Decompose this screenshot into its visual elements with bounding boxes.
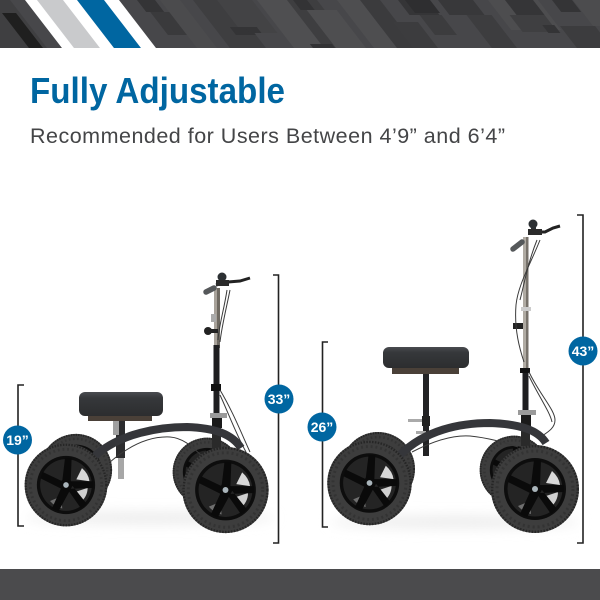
header band with geometric pattern <box>0 0 600 48</box>
rear wheels, far side <box>341 432 548 506</box>
steering column <box>513 237 536 446</box>
brake cables <box>412 240 555 452</box>
front wheels <box>327 441 579 533</box>
dimension: 33 inch handle height: 33” <box>268 391 290 407</box>
footer band <box>0 569 600 600</box>
dimension: 33 inch handle height <box>264 275 294 543</box>
seat cushion <box>79 392 163 421</box>
seat cushion <box>383 347 469 374</box>
front wheels <box>25 444 269 533</box>
curved frame <box>400 423 546 455</box>
steering column <box>204 288 227 452</box>
dimension: 26 inch seat height: 26” <box>311 419 333 435</box>
dimension: 19 inch seat height: 19” <box>6 432 29 448</box>
curved frame <box>95 427 241 456</box>
header stripes <box>25 0 156 48</box>
dimension: 43 inch handle height: 43” <box>572 343 594 359</box>
seat post <box>408 372 430 456</box>
subtitle: Recommended for Users Between 4’9” and 6’4” <box>30 124 505 148</box>
knee scooter: highest position <box>327 220 579 533</box>
handlebar and brake <box>206 272 250 292</box>
dimension: 19 inch seat height <box>3 385 32 526</box>
title: Fully Adjustable <box>30 70 285 111</box>
dimension: 43 inch handle height <box>568 215 598 543</box>
handlebar and brake <box>513 220 560 249</box>
dimension: 26 inch seat height <box>308 342 336 527</box>
knee scooter: lowest position <box>25 272 269 533</box>
seat post <box>113 420 125 479</box>
rear wheels, far side <box>40 434 241 506</box>
floor shadows <box>25 512 580 528</box>
brake cables <box>110 290 250 462</box>
